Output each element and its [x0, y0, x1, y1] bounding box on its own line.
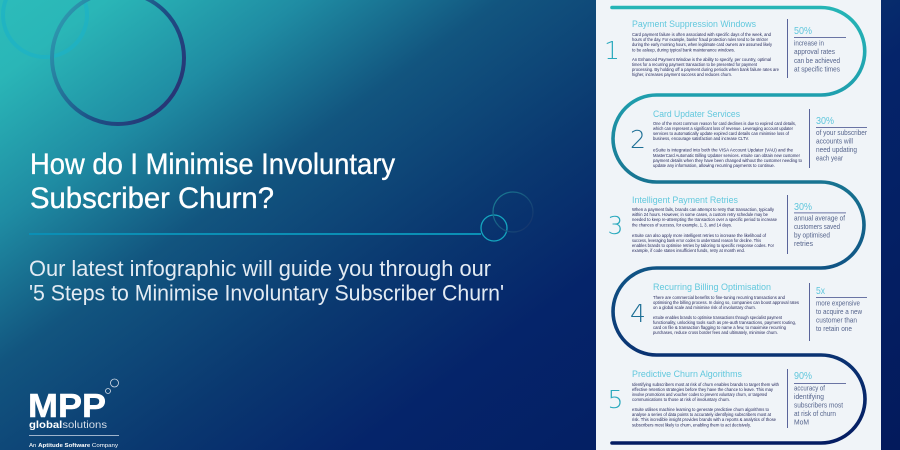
step 1: Payment Suppression Windows: Payment Suppression Windows	[632, 19, 756, 30]
step 2: Card Updater Services: update any information, allowing recurring payments to continue.	[653, 163, 775, 168]
step 2: Card Updater Services: 2	[630, 125, 646, 154]
divider line with rings	[29, 192, 533, 241]
step 5: Predictive Churn Algorithms: communications to those at risk of involuntary churn.	[632, 397, 730, 402]
step 4: Recurring Billing Optimisation: There are commercial benefits to fine-tuning recurring transactions and	[653, 295, 786, 300]
step 4: Recurring Billing Optimisation: to retain one	[816, 324, 852, 333]
step 1: Payment Suppression Windows: can be achieved	[794, 56, 840, 65]
step 2: Card Updater Services: One of the most common reason for card declines is due to expired card details,	[653, 121, 796, 126]
step 3: Intelligent Payment Retries: by optimised	[794, 230, 830, 240]
step 3: Intelligent Payment Retries: the chances of success, for example, 1, 3, and 14 days.	[632, 222, 732, 228]
step 2: Card Updater Services: payment details when they have been changed without the customer needing to	[653, 158, 803, 163]
step 2: Card Updater Services: 30%	[816, 115, 834, 127]
step 3: Intelligent Payment Retries: eSuite can also apply more intelligent retries to increase the likelihood of	[632, 233, 767, 238]
step 3: Intelligent Payment Retries: enables brands to optimise retries by tailoring to specific response codes. For	[632, 243, 775, 248]
step 5: Predictive Churn Algorithms: Predictive Churn Algorithms	[632, 369, 742, 380]
subtitle: '5 Steps to Minimise Involuntary Subscriber Churn'	[29, 280, 504, 306]
step 5: Predictive Churn Algorithms: identifying	[794, 392, 824, 401]
step 2: Card Updater Services: which can represent a significant loss of revenue. Leveraging account updater	[653, 126, 794, 131]
logo: MPP global solutions: MPP	[28, 387, 106, 424]
step 1: Payment Suppression Windows: Card payment failure is often associated with specific days of the week, and	[632, 32, 772, 37]
step 1: Payment Suppression Windows: at specific times	[794, 64, 840, 74]
logo: MPP global solutions: An Aptitude Software Company	[29, 443, 118, 449]
step 4: Recurring Billing Optimisation: optimising the billing process. In doing so, companies can boost approval rates	[653, 300, 799, 305]
step 2: Card Updater Services: each year	[816, 154, 844, 162]
step 2: Card Updater Services: Card Updater Services	[653, 109, 740, 120]
step 3: Intelligent Payment Retries	[608, 195, 846, 254]
step 2: Card Updater Services: of your subscriber	[816, 128, 868, 137]
step 2: Card Updater Services	[630, 109, 868, 168]
serpentine path	[612, 8, 865, 443]
step 4: Recurring Billing Optimisation: eSuite enables brands to optimise transactions through specialist payment	[653, 315, 783, 320]
title	[30, 148, 395, 215]
step 1: Payment Suppression Windows: processing. By holding off a payment during periods when bank failure rates are	[632, 67, 780, 72]
step 3: Intelligent Payment Retries: customers saved	[794, 222, 840, 231]
step 3: Intelligent Payment Retries: annual average of	[794, 214, 845, 222]
step 1: Payment Suppression Windows: higher, increases payment success and reduces churn.	[632, 72, 732, 77]
step 4: Recurring Billing Optimisation	[630, 282, 867, 341]
step 4: Recurring Billing Optimisation: Recurring Billing Optimisation	[653, 282, 771, 293]
step 3: Intelligent Payment Retries: 3	[608, 211, 623, 240]
step 3: Intelligent Payment Retries: example, if code states insufficient funds, retry at month end.	[632, 248, 745, 253]
step 3: Intelligent Payment Retries: 30%	[794, 201, 812, 213]
subtitle	[29, 256, 504, 306]
step 4: Recurring Billing Optimisation: customer than	[816, 316, 857, 324]
title: Subscriber Churn?	[30, 182, 274, 215]
step 5: Predictive Churn Algorithms: subscribers most likely to churn, enabling them to act decisively.	[632, 422, 751, 428]
step 3: Intelligent Payment Retries: When a payment fails, brands can attempt to retry that transaction, typically	[632, 207, 775, 212]
step 1: Payment Suppression Windows: 50%	[794, 25, 812, 37]
step 3: Intelligent Payment Retries: Intelligent Payment Retries	[632, 195, 738, 206]
step 2: Card Updater Services: services to automatically update expired card details can minimise loss of	[653, 131, 790, 136]
step 5: Predictive Churn Algorithms	[608, 369, 846, 428]
step 5: Predictive Churn Algorithms: effective retention strategies before they have the chance to leave. This may	[632, 387, 774, 392]
step 2: Card Updater Services: MasterCard Automatic Billing Updater services. eSuite can obtain new customer	[653, 153, 801, 158]
step 5: Predictive Churn Algorithms: analyse a series of data points to accurately identifying subscribers most at	[632, 412, 772, 417]
step 4: Recurring Billing Optimisation: purchases, reduce cross border fees and ultimately, minimise churn.	[653, 330, 778, 335]
step 1: Payment Suppression Windows	[604, 19, 846, 78]
step 1: Payment Suppression Windows: 1	[604, 36, 620, 65]
step 1: Payment Suppression Windows: hours of the day. For example, banks' fraud protection rules tend to be stricter	[632, 37, 769, 42]
logo: MPP global solutions	[28, 379, 119, 449]
subtitle: Our latest infographic will guide you through our	[29, 256, 491, 281]
step 3: Intelligent Payment Retries: within 24 hours. However, in some cases, a custom retry schedule may be	[632, 212, 769, 217]
step 1: Payment Suppression Windows: approval rates	[794, 47, 835, 56]
step 5: Predictive Churn Algorithms: 5	[608, 385, 623, 414]
step 1: Payment Suppression Windows: during the early morning hours, when legitimate card owners are assumed likely	[632, 42, 773, 47]
step 5: Predictive Churn Algorithms: Identifying subscribers most at risk of churn enables brands to target them with	[632, 382, 780, 387]
step 3: Intelligent Payment Retries: success, leveraging bank error codes to understand reason for decline. This	[632, 238, 761, 243]
step 5: Predictive Churn Algorithms: 90%	[794, 370, 812, 382]
step 4: Recurring Billing Optimisation: 4	[630, 299, 646, 328]
step 1: Payment Suppression Windows: times for a recurring payment transaction to be presented for payment	[632, 62, 758, 67]
step 5: Predictive Churn Algorithms: risk. This incredible insight provides brands with a reports & analytics of those	[632, 417, 777, 422]
step 2: Card Updater Services: accounts will	[816, 136, 853, 146]
logo: MPP global solutions: global solutions	[29, 420, 107, 431]
step 2: Card Updater Services: eSuite is integrated into both the VISA Account Updater (VAU) and the	[653, 148, 794, 152]
step 4: Recurring Billing Optimisation: card on file & transaction flagging to name a few, to maximise recurring	[653, 325, 787, 330]
title: How do I Minimise Involuntary	[30, 148, 395, 181]
step 4: Recurring Billing Optimisation: more expensive	[816, 298, 860, 308]
step 2: Card Updater Services: need updating	[816, 145, 857, 154]
step 1: Payment Suppression Windows: increase in	[794, 38, 824, 48]
step 4: Recurring Billing Optimisation: on a global scale and minimise risk of involuntary churn.	[653, 305, 756, 310]
step 5: Predictive Churn Algorithms: involve promotions and voucher codes to prevent voluntary churn, or targeted	[632, 392, 768, 397]
step 3: Intelligent Payment Retries: needed to keep re-attempting the transaction over a specific period to increase	[632, 217, 778, 222]
step 5: Predictive Churn Algorithms: accuracy of	[794, 384, 825, 392]
step 4: Recurring Billing Optimisation: functionality, unlocking tools such as pre-auth transactions, payment routing,	[653, 320, 796, 325]
step 3: Intelligent Payment Retries: retries	[794, 239, 813, 248]
decorative rings: top left	[3, 0, 184, 124]
step 1: Payment Suppression Windows: An Enhanced Payment Window is the ability to specify, per country, optimal	[632, 57, 771, 62]
panel: infographic preview	[596, 0, 881, 450]
step 4: Recurring Billing Optimisation: 5x	[816, 285, 826, 297]
step 1: Payment Suppression Windows: to be asleep, during typical bank maintenance windows.	[632, 48, 735, 52]
step 4: Recurring Billing Optimisation: to acquire a new	[816, 307, 863, 316]
step 5: Predictive Churn Algorithms: at risk of churn	[794, 409, 836, 418]
step 5: Predictive Churn Algorithms: subscribers most	[794, 400, 843, 410]
step 2: Card Updater Services: business, encourage satisfaction and increase CLTV.	[653, 136, 749, 141]
step 5: Predictive Churn Algorithms: MoM	[794, 418, 809, 426]
step 5: Predictive Churn Algorithms: eSuite utilises machine learning to generate predictive churn algorithms to	[632, 407, 770, 412]
